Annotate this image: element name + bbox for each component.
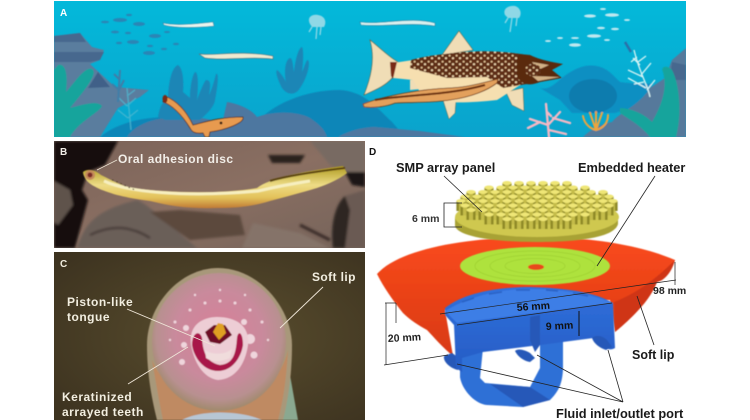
callout: SMP array panel xyxy=(396,160,495,212)
callout: keratinized arrayed teeth: arrayed teeth xyxy=(62,405,144,419)
panel label B: B xyxy=(60,147,67,158)
fins and tail xyxy=(442,31,473,55)
panel label A: A xyxy=(60,8,67,19)
callout: piston-like tongue: tongue xyxy=(67,310,110,324)
left port xyxy=(444,353,462,370)
jellyfish xyxy=(309,6,521,39)
callout: piston-like tongue xyxy=(67,295,215,346)
panel label C: C xyxy=(60,259,67,270)
callout: keratinized arrayed teeth xyxy=(62,347,188,419)
left seaweed xyxy=(54,65,102,137)
lamprey on trout xyxy=(363,79,498,107)
orange coral xyxy=(583,112,608,130)
center rib and ports xyxy=(530,315,540,352)
callout: fluid inlet/outlet port xyxy=(457,350,684,420)
dimension: 56 mm: 56 mm xyxy=(516,300,550,314)
panel B: photo of sea lamprey on rocks xyxy=(54,141,365,248)
embedded heater green disc xyxy=(460,247,610,285)
callout: keratinized arrayed teeth: Keratinized xyxy=(62,390,132,404)
dimension: 98 mm: 98 mm xyxy=(653,285,686,297)
dimension: 9 mm xyxy=(546,311,579,336)
callout: embedded heater xyxy=(578,160,685,266)
eel: top right xyxy=(360,20,435,26)
chamber body xyxy=(445,287,615,372)
panel D: 3D device model xyxy=(369,147,686,420)
callout: soft lip xyxy=(632,296,675,362)
callout: oral adhesion disc xyxy=(97,152,233,170)
trout speckled back xyxy=(410,51,527,88)
SMP array panel xyxy=(455,181,619,242)
background coral left xyxy=(158,65,218,120)
trout belly xyxy=(393,60,525,102)
callout: soft lip: Soft lip xyxy=(632,348,675,362)
dimension: 98 mm xyxy=(440,262,686,314)
dimension: 9 mm: 9 mm xyxy=(546,320,574,333)
body below head xyxy=(282,378,298,420)
lamprey body xyxy=(83,166,347,208)
panel C: close-up of lamprey mouth xyxy=(54,252,365,420)
dimension: 20 mm: 20 mm xyxy=(388,331,421,345)
dark crevice background xyxy=(54,141,118,248)
soft lip red suction cup xyxy=(377,237,675,356)
right dome rock and rocks xyxy=(540,48,686,137)
pink coral xyxy=(528,104,570,137)
eel: top left xyxy=(163,22,214,27)
oral disc xyxy=(147,268,292,420)
white fern xyxy=(625,42,655,97)
callout: SMP array panel: SMP array panel xyxy=(396,160,495,175)
left school of fish xyxy=(101,14,179,55)
inner mouth xyxy=(191,317,248,380)
right seaweed xyxy=(620,67,679,137)
dimension: 6 mm: 6 mm xyxy=(412,213,439,225)
seabed hills xyxy=(100,90,465,137)
chamber top face xyxy=(445,289,612,323)
teeth rows xyxy=(169,289,269,365)
left rock formation xyxy=(54,33,149,137)
D-shaped handle xyxy=(460,335,563,407)
callout: oral adhesion disc: Oral adhesion disc xyxy=(118,152,233,166)
blue fluid chamber and handle xyxy=(444,287,615,407)
callout: piston-like tongue: Piston-like xyxy=(67,295,133,309)
panel label D: D xyxy=(369,147,376,158)
adult lake trout with lamprey attached xyxy=(364,31,563,119)
trout head xyxy=(517,54,563,84)
panel A: underwater illustration xyxy=(54,1,686,137)
callout: soft lip: Soft lip xyxy=(312,270,356,284)
pale fern left xyxy=(118,88,138,130)
callout: soft lip xyxy=(280,270,356,328)
dimension: 56 mm xyxy=(457,300,612,325)
dimension: 6 mm xyxy=(412,203,462,227)
eel: middle left xyxy=(199,53,273,59)
foreground rocks xyxy=(77,200,197,248)
lamprey on seabed xyxy=(162,95,243,137)
callout: embedded heater: Embedded heater xyxy=(578,160,685,175)
right school of fish xyxy=(545,8,630,47)
dimension: 20 mm xyxy=(384,303,448,365)
